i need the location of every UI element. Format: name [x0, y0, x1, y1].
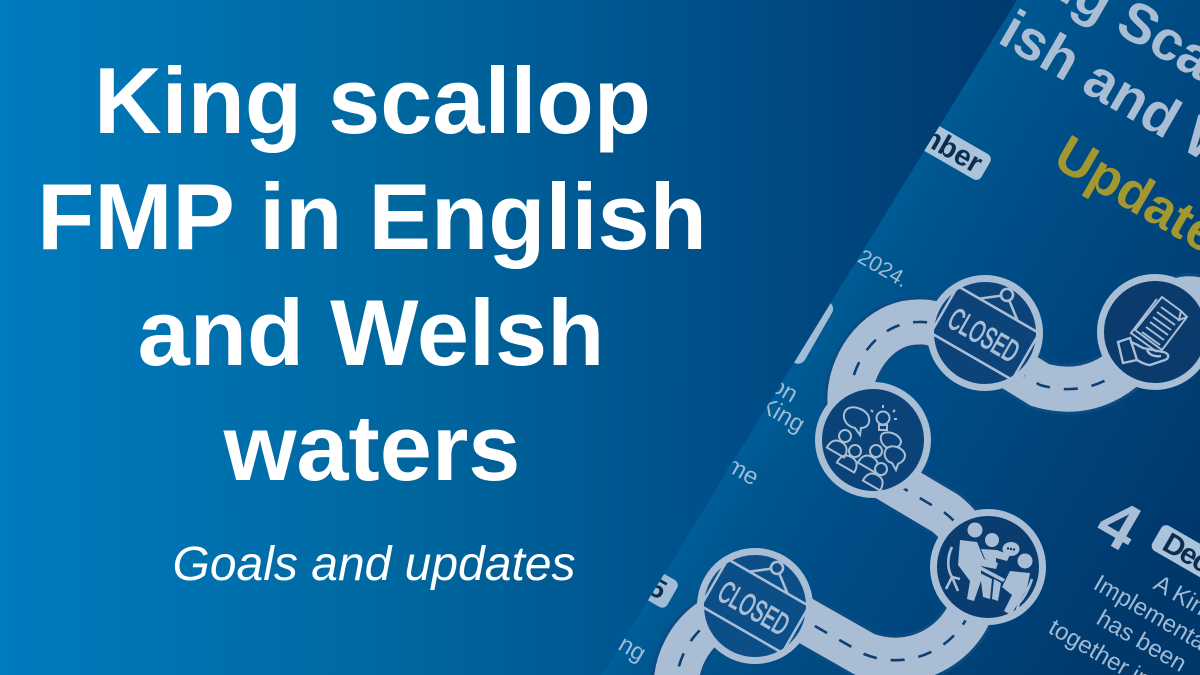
- panel: tilted infographic preview: [572, 0, 1200, 675]
- icon: people with ideas: [818, 386, 928, 494]
- title: FMP in English: [37, 164, 707, 269]
- step number 4: 4: [1085, 483, 1154, 566]
- date pill: 5: [648, 574, 678, 608]
- partial text: on: Consultation: [673, 318, 802, 408]
- icon: closed sign 1: CLOSED: [942, 301, 1025, 369]
- partial text: King: the King: [720, 371, 810, 438]
- road: [676, 299, 1200, 675]
- icon: closed sign 1: [928, 275, 1043, 391]
- title: King scallop: [94, 48, 651, 153]
- title: waters: [223, 395, 520, 500]
- partial text: 2024: in 2024.: [834, 233, 912, 292]
- icon: closed sign 2: [697, 548, 813, 664]
- icon: people meeting at table: [934, 512, 1042, 622]
- date pill: December: [924, 126, 991, 180]
- partial text: me: scheme: [677, 426, 764, 491]
- partial text: ng: closing: [572, 606, 650, 667]
- road surface: [676, 299, 1200, 675]
- partial pill: [794, 303, 834, 364]
- date pill: 5: 5: [644, 572, 672, 605]
- step 4 body text: [1044, 570, 1200, 675]
- panel background: [600, 0, 1200, 675]
- road centre dashes: [678, 320, 1105, 667]
- road outline: [676, 299, 1200, 675]
- icon: closed sign 2: CLOSED: [712, 574, 795, 642]
- icon: document in hand: [1100, 278, 1200, 386]
- subtitle: Goals and updates: [173, 538, 575, 591]
- date pill: December: December: [850, 82, 988, 180]
- title: [37, 48, 707, 500]
- title: and Welsh: [138, 280, 604, 385]
